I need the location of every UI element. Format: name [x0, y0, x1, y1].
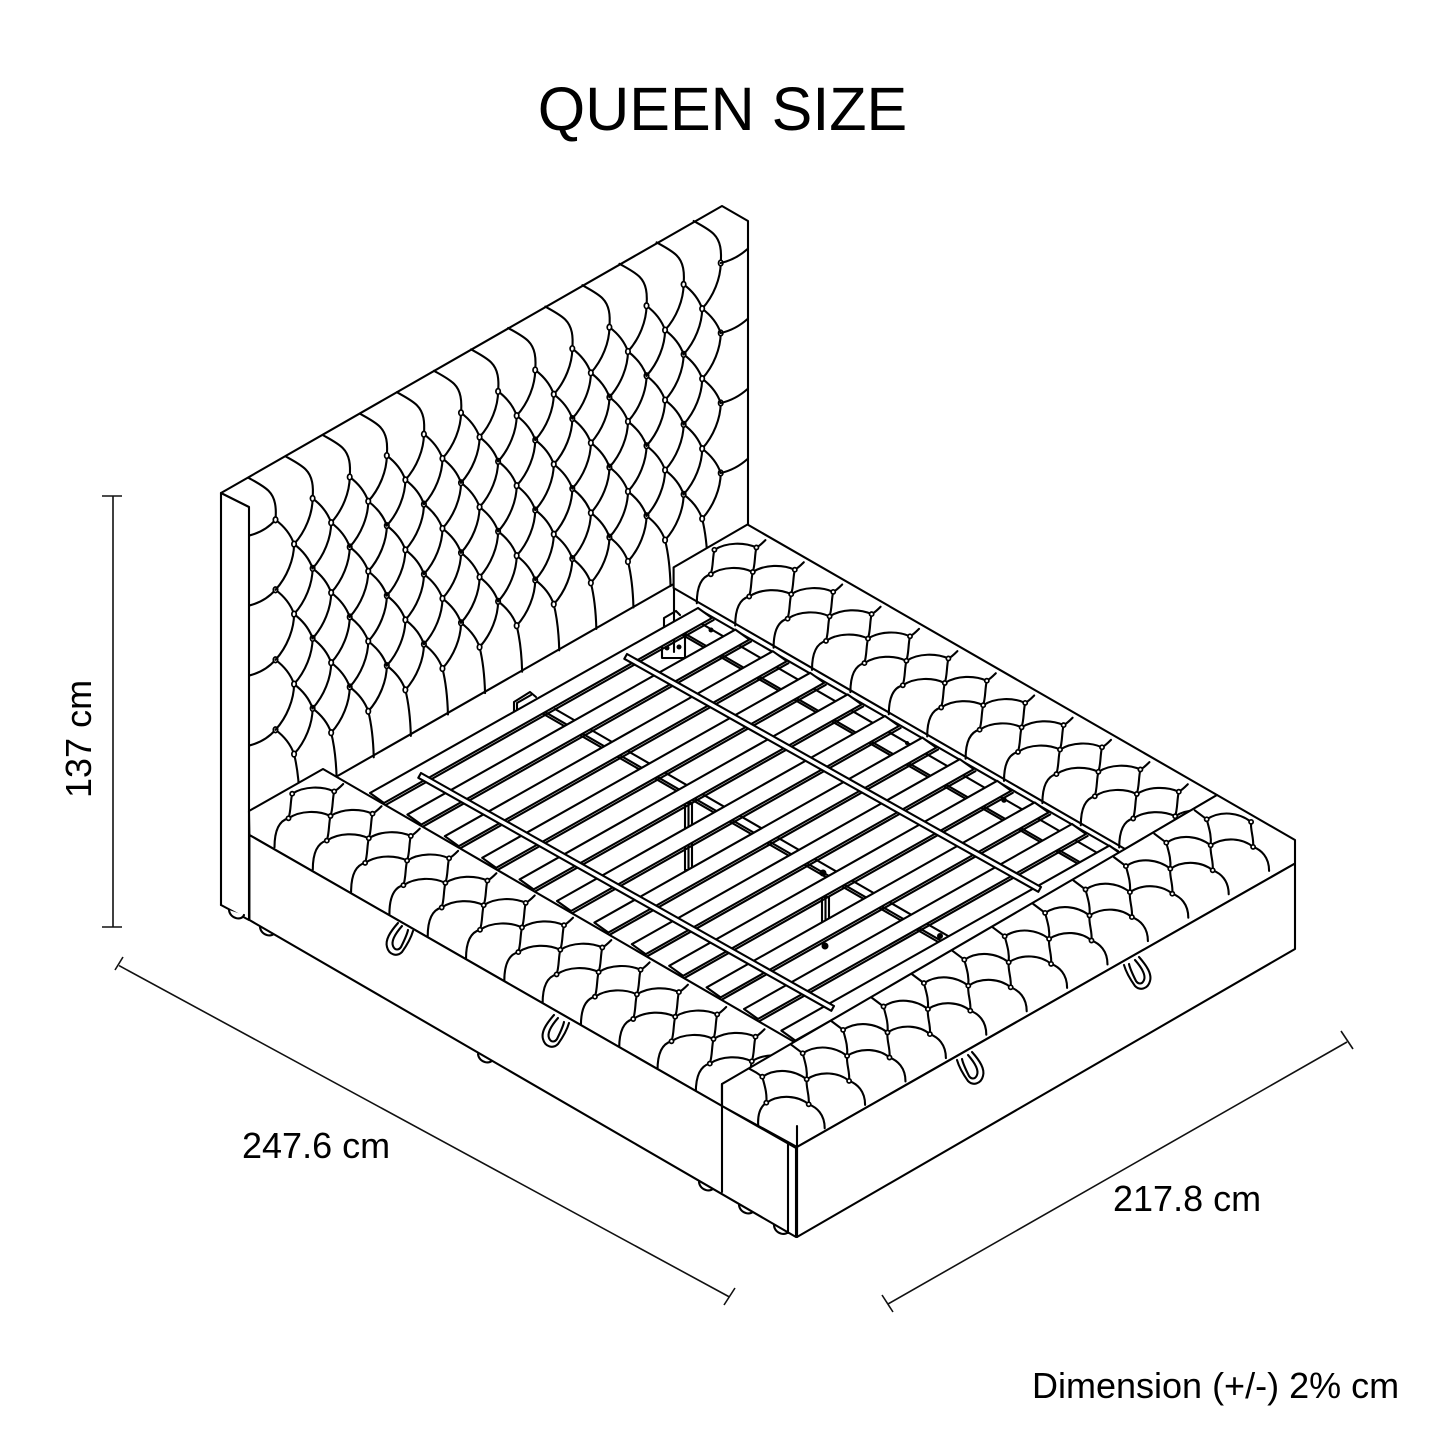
slats: [370, 608, 1125, 1043]
centre support bar: [540, 709, 955, 943]
left side panel: [249, 835, 796, 1237]
tolerance note: Dimension (+/-) 2% cm: [1032, 1365, 1399, 1406]
headboard brackets: [514, 588, 685, 714]
title: QUEEN SIZE: [538, 75, 907, 143]
foot panel: [797, 864, 1295, 1237]
long cross bars: [418, 654, 1041, 1011]
bed illustration: [221, 206, 1295, 1237]
headboard: [221, 206, 748, 920]
dimension: width: [882, 1031, 1353, 1312]
side rail under slat ends: [680, 610, 1118, 871]
support legs: [685, 803, 943, 950]
foot rail cushion: [722, 795, 1295, 1147]
dimension: length: [115, 957, 735, 1305]
slatted platform: [370, 588, 1125, 1043]
right side rail cushion: [674, 524, 1226, 849]
dimension: length: 247.6 cm: [242, 1125, 390, 1166]
dimension: width: 217.8 cm: [1113, 1178, 1261, 1219]
storage lift handles: [387, 923, 1150, 1084]
dimension: height: 137 cm: [58, 680, 99, 798]
left side rail cushion: [249, 769, 803, 1106]
feet: [229, 910, 789, 1234]
dimension: height: [58, 496, 122, 927]
